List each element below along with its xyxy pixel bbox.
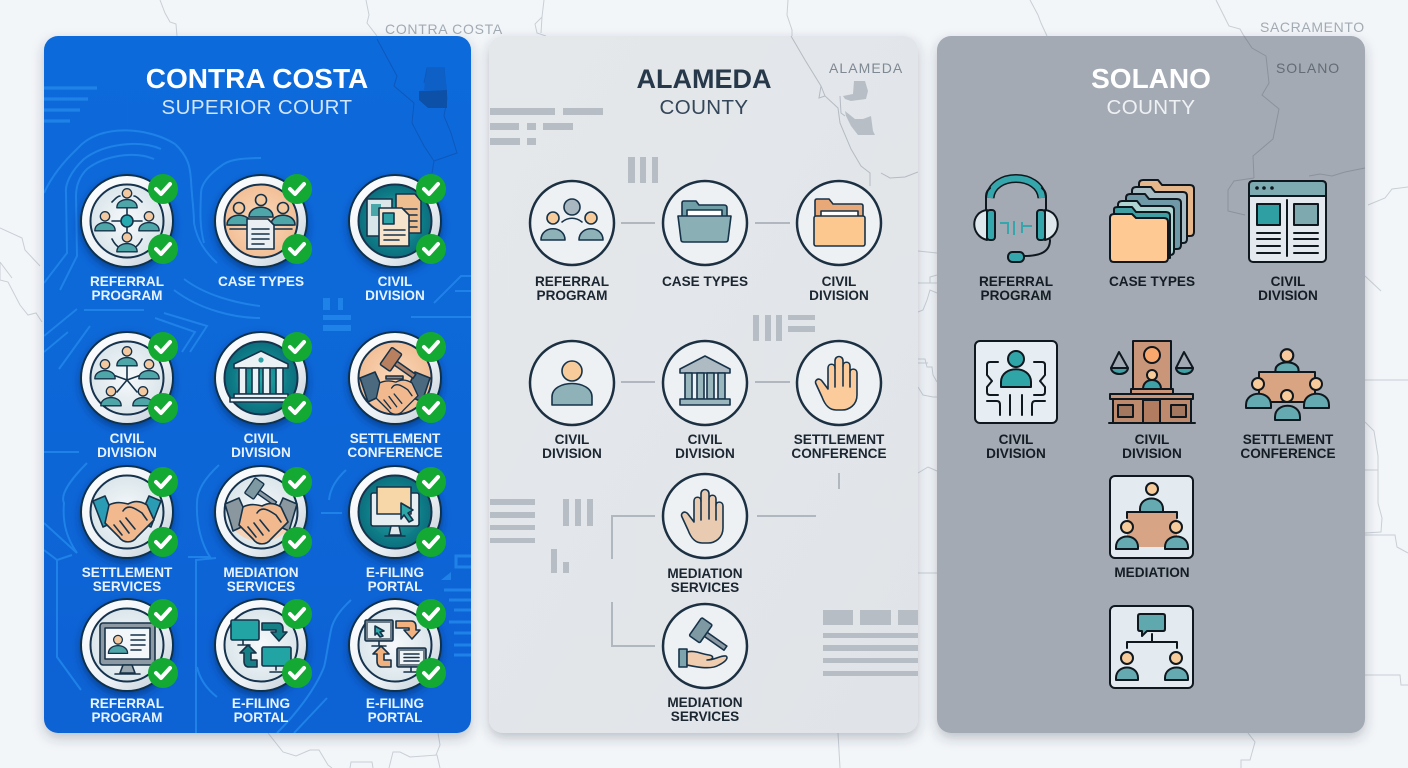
map label: Sacramento: SACRAMENTO <box>1260 19 1365 35</box>
label: PORTAL <box>368 579 422 594</box>
label <box>1240 432 1336 461</box>
icon: referral network badge <box>81 175 173 267</box>
item: Civil Division (documents) <box>349 174 446 303</box>
label: SERVICES <box>671 709 739 724</box>
icon: person with pathways box <box>975 341 1057 423</box>
item: Settlement Services <box>81 466 178 594</box>
check marks <box>282 174 312 264</box>
label: E-FILING <box>232 696 290 711</box>
item: Case Types <box>1109 180 1195 289</box>
label: CIVIL <box>1271 274 1305 289</box>
label <box>97 431 157 460</box>
label: REFERRAL <box>90 696 164 711</box>
label: SERVICES <box>671 580 739 595</box>
check marks <box>416 599 446 688</box>
icon: monitor with profile badge <box>81 599 173 691</box>
label: REFERRAL <box>90 274 164 289</box>
label: DIVISION <box>231 445 291 460</box>
heading: Alameda County: ALAMEDA <box>636 64 772 94</box>
icon: two teal monitors badge <box>215 599 307 691</box>
label <box>809 274 869 303</box>
label: CASE TYPES <box>218 274 304 289</box>
icon: group star badge <box>81 332 173 424</box>
label <box>231 431 291 460</box>
label: PROGRAM <box>92 710 162 725</box>
label <box>542 432 602 461</box>
label: DIVISION <box>97 445 157 460</box>
heading: Alameda County <box>636 64 772 119</box>
icon: mediation table box <box>1110 476 1193 558</box>
icon: two gray monitors badge <box>349 599 441 691</box>
heading: Contra Costa Superior Court: CONTRA COSTA <box>146 63 368 94</box>
check marks <box>416 332 446 423</box>
icon: documents badge <box>349 175 441 267</box>
heading: Alameda County: COUNTY <box>660 96 748 119</box>
label <box>667 695 743 724</box>
item: Civil Division (group) <box>81 332 178 460</box>
label: PROGRAM <box>980 288 1052 303</box>
item: Civil Division (courthouse) <box>663 341 747 461</box>
item: E-Filing Portal (teal monitors) <box>215 599 312 725</box>
label: CIVIL <box>378 274 412 289</box>
icon: handshake badge <box>81 466 173 558</box>
icon: peach folder circle <box>797 181 881 265</box>
label: MEDIATION <box>667 566 743 581</box>
label <box>979 274 1053 303</box>
item: Mediation hierarchy icon <box>1110 606 1193 688</box>
label: SETTLEMENT <box>350 431 441 446</box>
label: MEDIATION <box>667 695 743 710</box>
map label: Alameda: ALAMEDA <box>829 60 903 76</box>
check marks <box>416 174 446 264</box>
item: Case Types <box>215 174 312 289</box>
label: DIVISION <box>1258 288 1318 303</box>
item: Civil Division (person) <box>530 341 614 461</box>
label <box>667 566 743 595</box>
icon: raised hand circle <box>663 474 747 558</box>
label: DIVISION <box>986 446 1046 461</box>
label: REFERRAL <box>979 274 1053 289</box>
heading: Contra Costa Superior Court <box>146 63 368 119</box>
label: MEDIATION <box>1114 565 1190 580</box>
label <box>365 274 425 303</box>
label <box>366 696 424 725</box>
label <box>82 565 173 594</box>
label: CONFERENCE <box>1240 446 1336 461</box>
label: PORTAL <box>234 710 288 725</box>
heading: Contra Costa Superior Court: SUPERIOR COURT <box>162 96 353 119</box>
icon: monitor with folder badge <box>349 466 441 558</box>
label: CIVIL <box>1135 432 1169 447</box>
item: Referral Program <box>974 178 1058 303</box>
item: Civil Division (window) <box>1249 181 1326 303</box>
item: Referral Program (monitor) <box>81 599 178 725</box>
item: Civil Division (courthouse) <box>215 332 312 460</box>
label: CIVIL <box>999 432 1033 447</box>
check marks <box>148 174 178 264</box>
label: DIVISION <box>809 288 869 303</box>
label: CASE TYPES <box>662 274 748 289</box>
heading: Solano County: COUNTY <box>1107 96 1195 119</box>
label: SERVICES <box>93 579 161 594</box>
label: CIVIL <box>555 432 589 447</box>
label: DIVISION <box>365 288 425 303</box>
icon: headset <box>974 178 1058 262</box>
label: PROGRAM <box>536 288 608 303</box>
label <box>90 696 164 725</box>
item: Mediation Services (gavel) <box>663 604 747 724</box>
icon: gavel and handshake badge, gray sleeves <box>215 466 307 558</box>
label: CIVIL <box>688 432 722 447</box>
label <box>347 431 443 460</box>
item: Civil Division (peach folder) <box>797 181 881 303</box>
label: E-FILING <box>366 565 424 580</box>
item: Settlement Conference <box>791 341 887 461</box>
label: CIVIL <box>244 431 278 446</box>
panel: Alameda County <box>489 36 918 733</box>
item: Referral Program <box>530 181 614 303</box>
map label: Solano: SOLANO <box>1276 60 1340 76</box>
check marks <box>282 332 312 423</box>
item: Civil Division (judge bench) <box>1109 341 1195 461</box>
check marks <box>148 467 178 557</box>
label: SETTLEMENT <box>82 565 173 580</box>
item: E-Filing Portal (gray monitors) <box>349 599 446 725</box>
label: DIVISION <box>675 446 735 461</box>
icon: courthouse badge <box>215 332 307 424</box>
item: Settlement Conference <box>1240 349 1336 461</box>
icon: conference table <box>1246 349 1329 420</box>
icon: browser window <box>1249 181 1326 262</box>
label: PORTAL <box>368 710 422 725</box>
label <box>675 432 735 461</box>
label: CONFERENCE <box>347 445 443 460</box>
check marks <box>282 599 312 688</box>
icon: courthouse circle <box>663 341 747 425</box>
label: CIVIL <box>822 274 856 289</box>
heading: Solano County: SOLANO <box>1091 63 1211 94</box>
item: Case Types <box>662 181 748 289</box>
icon: people and document badge <box>215 175 307 267</box>
item: E-Filing Portal (monitor) <box>349 466 446 594</box>
label: REFERRAL <box>535 274 609 289</box>
icon: judge at bench with scales <box>1109 341 1195 423</box>
label: CONFERENCE <box>791 446 887 461</box>
label <box>90 274 164 303</box>
label <box>1122 432 1182 461</box>
icon: teal folder circle <box>663 181 747 265</box>
label <box>223 565 299 594</box>
label: MEDIATION <box>223 565 299 580</box>
icon: three people circle <box>530 181 614 265</box>
label: CASE TYPES <box>1109 274 1195 289</box>
map label: Contra Costa: CONTRA COSTA <box>385 21 503 37</box>
icon: person circle <box>530 341 614 425</box>
label: SETTLEMENT <box>1243 432 1334 447</box>
label: E-FILING <box>366 696 424 711</box>
icon: gavel over hand circle <box>663 604 747 688</box>
label: SETTLEMENT <box>794 432 885 447</box>
label: SERVICES <box>227 579 295 594</box>
check marks <box>148 332 178 423</box>
label <box>232 696 290 725</box>
label <box>366 565 424 594</box>
icon: speech bubble over two people <box>1110 606 1193 688</box>
check marks <box>282 467 312 557</box>
panel: Solano County <box>937 36 1365 733</box>
item: Settlement Conference <box>347 332 446 460</box>
label <box>535 274 609 303</box>
check marks <box>148 599 178 688</box>
heading: Solano County <box>1091 63 1211 119</box>
item: Mediation <box>1110 476 1193 580</box>
icon: folder stack <box>1110 180 1194 262</box>
check marks <box>416 467 446 557</box>
item: Mediation Services <box>215 466 312 594</box>
label <box>986 432 1046 461</box>
label: DIVISION <box>1122 446 1182 461</box>
label: CIVIL <box>110 431 144 446</box>
item: Referral Program <box>81 174 178 303</box>
label <box>1258 274 1318 303</box>
icon: raised hand circle <box>797 341 881 425</box>
icon: gavel and handshake badge <box>349 332 441 424</box>
item: Mediation Services (hand) <box>663 474 747 595</box>
panel: Contra Costa Superior Court <box>44 36 471 733</box>
label <box>791 432 887 461</box>
label: DIVISION <box>542 446 602 461</box>
label: PROGRAM <box>92 288 162 303</box>
item: Civil Division (person network) <box>975 341 1057 461</box>
